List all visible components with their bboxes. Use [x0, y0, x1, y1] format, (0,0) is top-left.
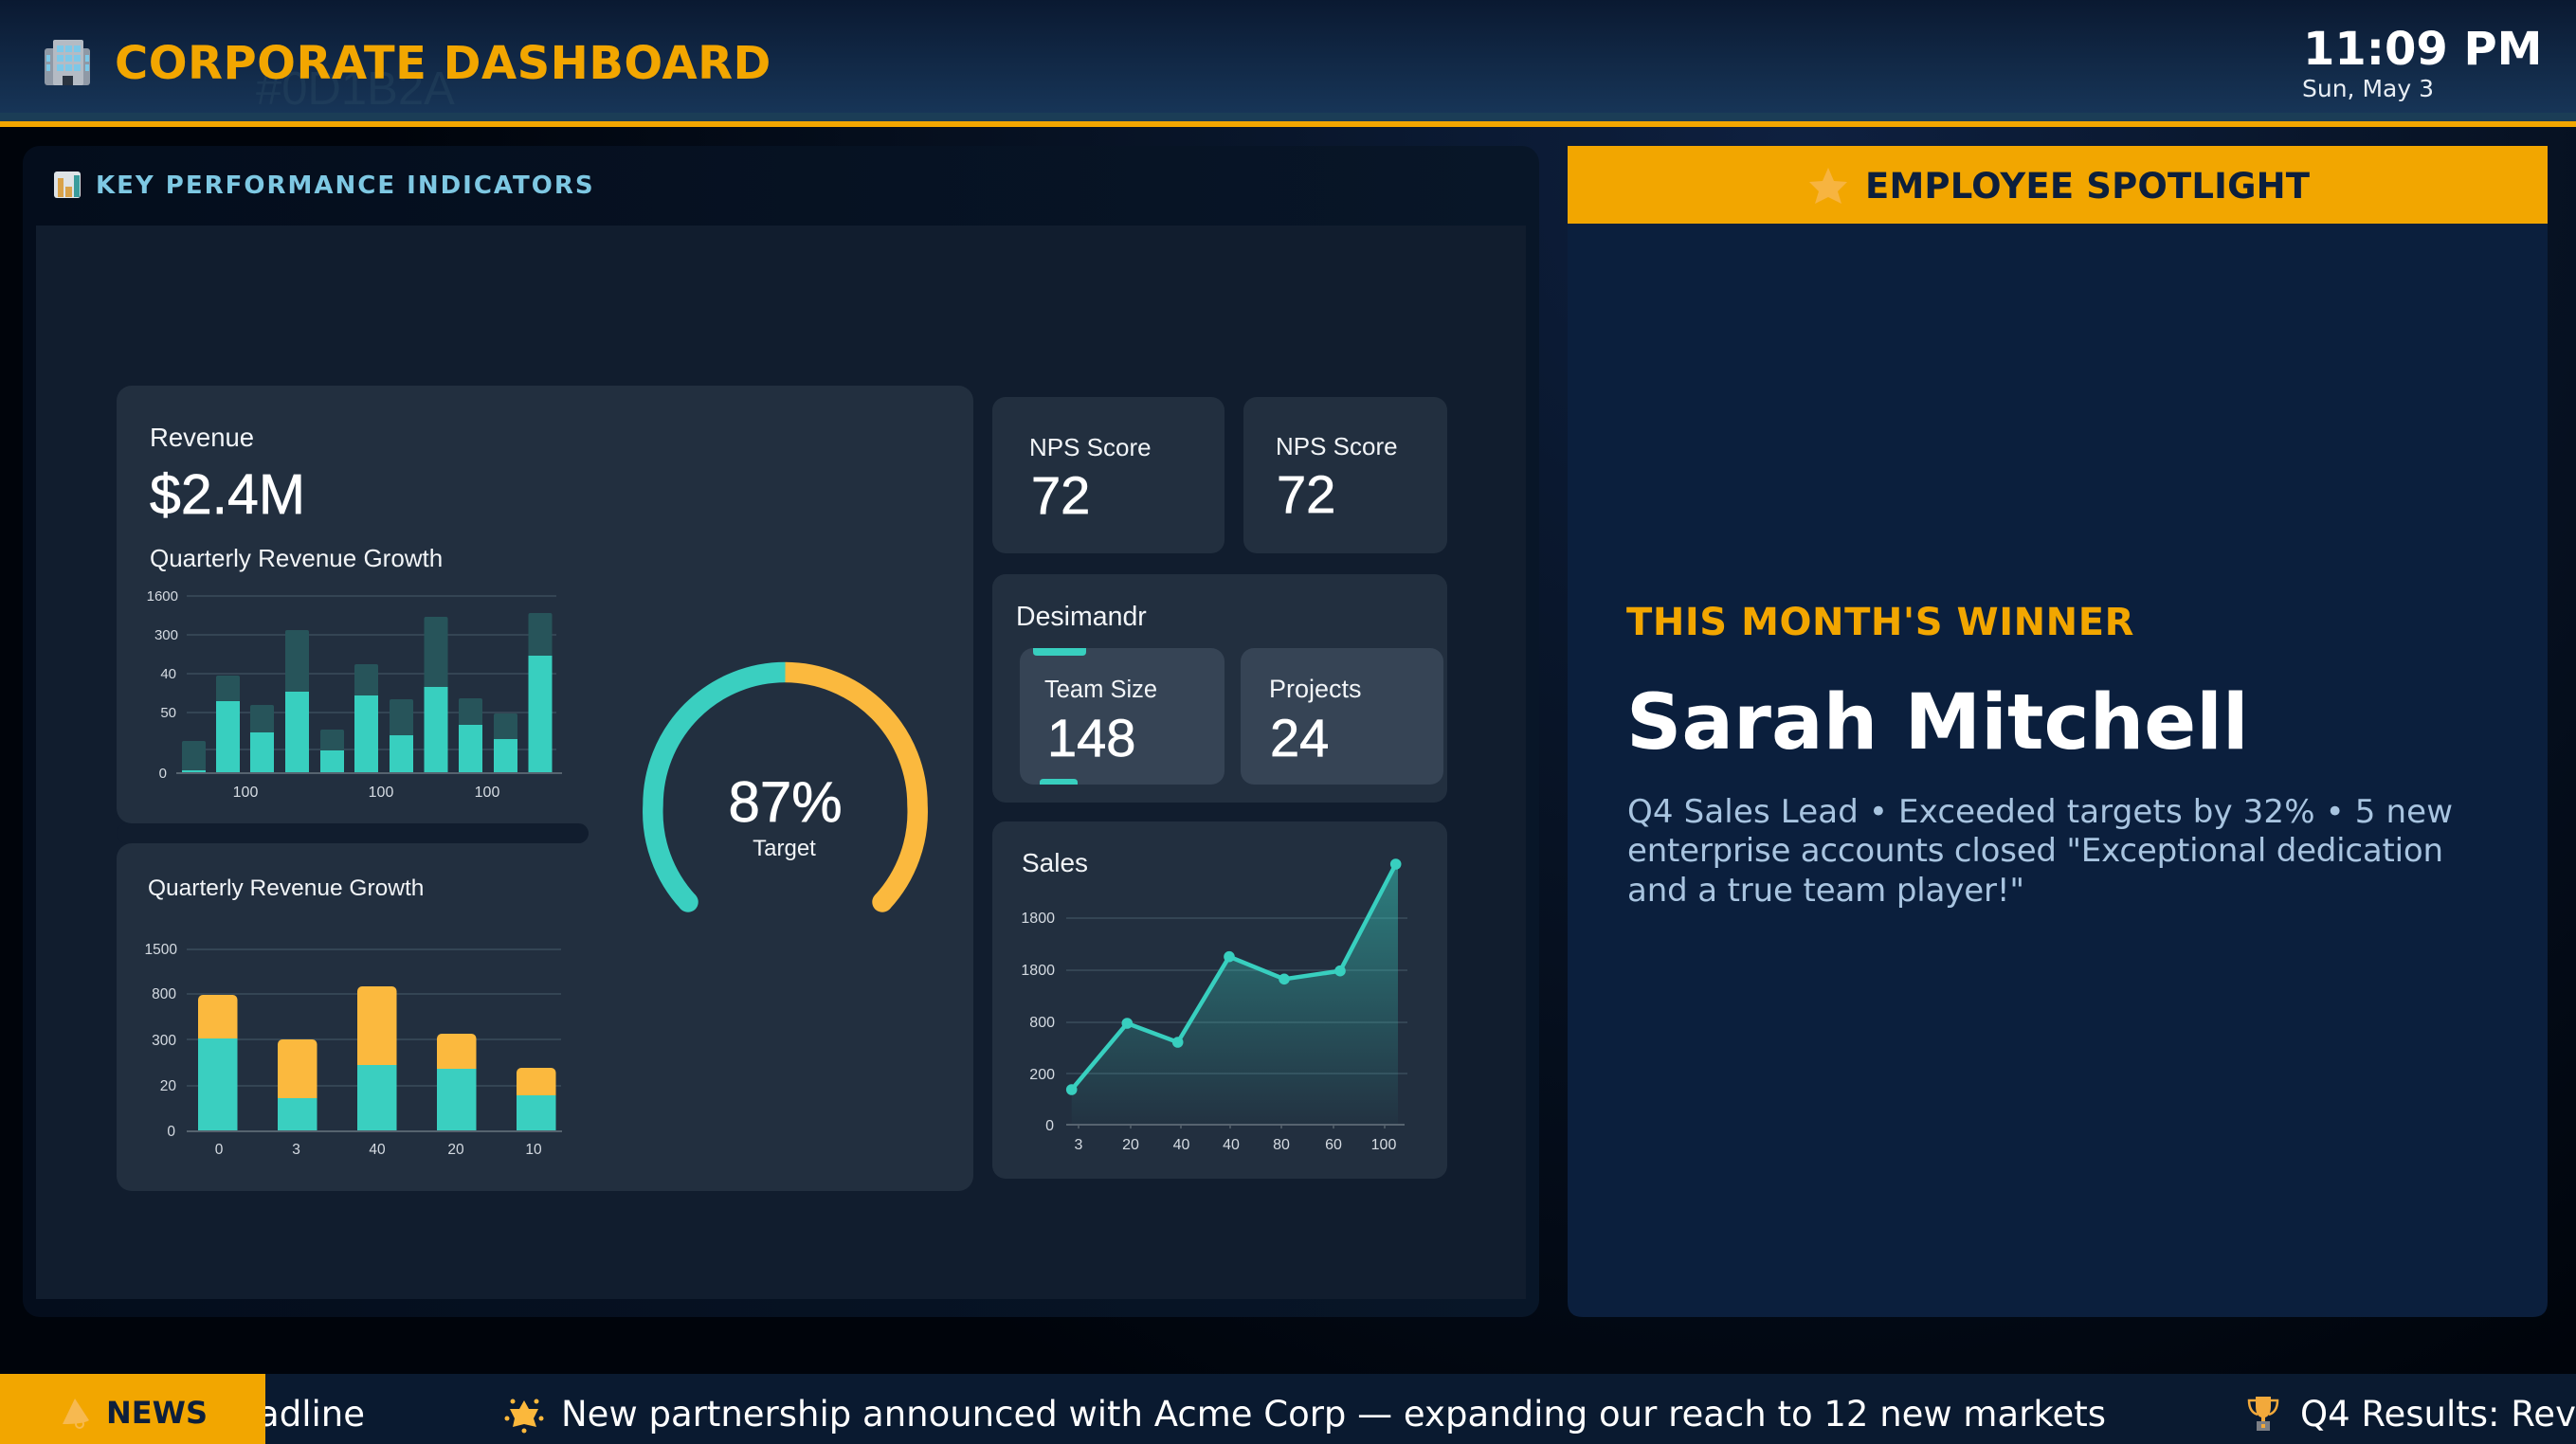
card: team size [1020, 648, 1225, 785]
card: sales line chart: 60 [1325, 1137, 1342, 1153]
card: projects: Projects [1269, 675, 1362, 703]
bar chart: revenue growth: 50 [160, 705, 176, 721]
stacked bar chart: 40 [369, 1142, 386, 1158]
gauge label: Target [753, 836, 816, 861]
winner description: Q4 Sales Lead • Exceeded targets by 32% • 5 new [1627, 793, 2453, 831]
stacked bar chart: 0 [215, 1142, 224, 1158]
stacked bar chart: 20 [447, 1142, 464, 1158]
winner description: and a true team player!" [1627, 872, 2024, 910]
card: sales line chart [992, 821, 1447, 1179]
header bar [0, 0, 2576, 127]
ticker text: previous headline: Headline [209, 1394, 365, 1435]
header bar: #0D1B2A [256, 63, 455, 115]
stacked bar chart: 1500 [145, 942, 177, 958]
winner heading: THIS MONTH'S WINNER [1626, 601, 2134, 644]
card: sales line chart: 80 [1273, 1137, 1290, 1153]
card: desimandr: Desimandr [1016, 602, 1147, 632]
winner description [1627, 793, 2453, 910]
stacked bar chart: 3 [292, 1142, 300, 1158]
bar chart: revenue growth: 300 [154, 627, 178, 643]
bar chart: revenue growth: 100 [369, 785, 393, 801]
card: sales line chart: 20 [1122, 1137, 1139, 1153]
card: NPS score right [1243, 397, 1447, 553]
card: NPS score right: 72 [1277, 464, 1335, 524]
icon: building [45, 40, 90, 85]
icon: megaphone [63, 1399, 89, 1428]
card: NPS score left [992, 397, 1225, 553]
card: team size: Team Size [1044, 677, 1157, 703]
bar chart: revenue growth: 40 [160, 666, 176, 682]
icon: trophy [2249, 1397, 2277, 1431]
card: NPS score left: 72 [1031, 465, 1090, 525]
winner name: Sarah Mitchell [1626, 678, 2249, 767]
chart heading: Quarterly Revenue Growth [150, 544, 443, 572]
card: desimandr [992, 574, 1447, 803]
news ticker [0, 1374, 2576, 1444]
stacked bar chart: 20 [160, 1078, 176, 1094]
icon: star [1809, 168, 1847, 204]
card: sales line chart: Sales [1022, 848, 1088, 877]
card: NPS score right: NPS Score [1276, 432, 1398, 460]
bar chart: revenue growth: 100 [233, 785, 258, 801]
card: sales line chart: 40 [1173, 1137, 1190, 1153]
panel: employee spotlight [1568, 146, 2548, 1317]
card: projects [1241, 648, 1443, 785]
card: NPS score left: NPS Score [1029, 433, 1152, 461]
clock date: Sun, May 3 [2302, 75, 2434, 102]
chart heading: second chart: Quarterly Revenue Growth [148, 875, 424, 901]
card: sales line chart: 1800 [1021, 911, 1055, 927]
card: sales line chart: 100 [1371, 1137, 1396, 1153]
dashboard image area [36, 226, 1526, 1299]
revenue value: $2.4M [150, 463, 305, 526]
icon: bar chart emoji [54, 171, 81, 198]
icon: sparkle star [504, 1399, 544, 1433]
clock time: 11:09 PM [2303, 23, 2542, 76]
news badge [0, 1374, 265, 1444]
winner description: enterprise accounts closed "Exceptional dedication [1627, 832, 2443, 870]
stacked bar chart [145, 942, 562, 1158]
title: CORPORATE DASHBOARD [115, 37, 771, 90]
card: sales line chart: 0 [1045, 1118, 1054, 1134]
card: sales line chart: 800 [1029, 1015, 1055, 1031]
news badge: NEWS [106, 1395, 208, 1431]
bar chart: revenue growth: 1600 [147, 588, 178, 605]
card: sales line chart: 1800 [1021, 963, 1055, 979]
stacked bar chart: 10 [525, 1142, 542, 1158]
bar chart: revenue growth: 100 [475, 785, 499, 801]
ticker text: partnership: New partnership announced with Acme Corp — expanding our reach to 12 new markets [561, 1394, 2106, 1435]
revenue label: Revenue [150, 423, 254, 452]
card: sales line chart: 3 [1075, 1137, 1083, 1153]
panel: key performance indicators [23, 146, 1539, 1317]
card: sales line chart: 200 [1029, 1067, 1055, 1083]
stacked bar chart: 800 [152, 986, 176, 1002]
gauge value: 87% [728, 770, 843, 834]
card: projects: 24 [1270, 708, 1329, 767]
spotlight header bar [1568, 146, 2548, 224]
spotlight header bar: EMPLOYEE SPOTLIGHT [1865, 166, 2311, 207]
stacked bar chart: 0 [167, 1124, 175, 1140]
bar chart: revenue growth [147, 588, 562, 801]
stacked bar chart: 300 [152, 1033, 176, 1049]
bar chart: revenue growth: 0 [159, 766, 167, 782]
card: revenue and quarterly charts [117, 386, 973, 1191]
gauge: 87 percent target [653, 673, 917, 912]
panel heading: KEY PERFORMANCE INDICATORS [96, 171, 595, 200]
card: sales line chart: 40 [1223, 1137, 1240, 1153]
card: team size: 148 [1047, 708, 1135, 767]
